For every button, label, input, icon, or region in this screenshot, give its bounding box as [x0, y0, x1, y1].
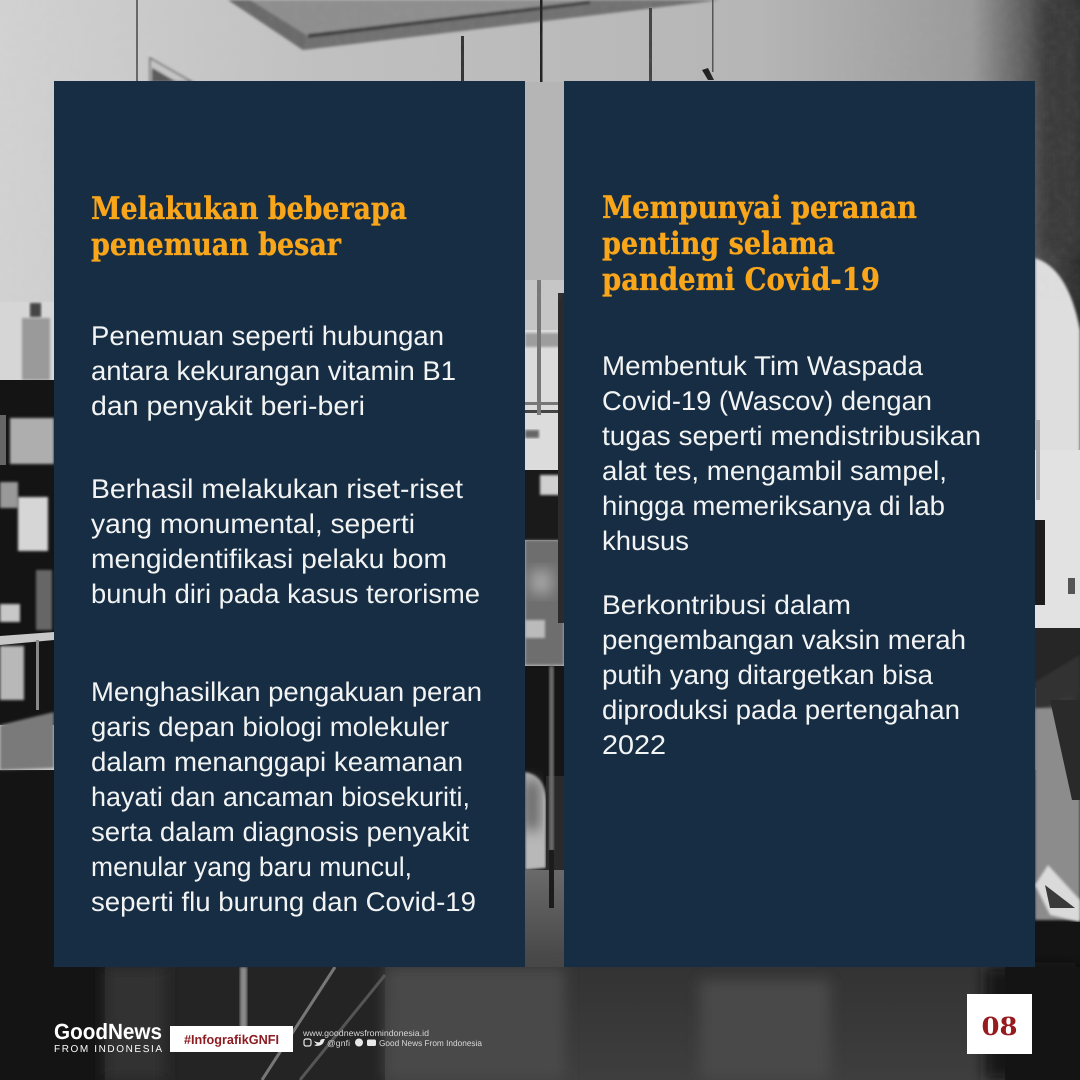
- logo: GoodNews From Indonesia: [54, 1019, 162, 1055]
- hashtag label: #InfografikGNFI: [184, 1032, 279, 1047]
- heading: Mempunyai peranan penting selama pandemi Covid-19: [602, 190, 917, 298]
- text block: biologi molekuler: dalam menanggapi keamanan: [91, 747, 463, 777]
- text block: vaksin merah putih: [602, 590, 966, 760]
- left shelves: [0, 302, 54, 382]
- centre gap between panels: [525, 82, 564, 282]
- icon: instagram: [304, 1039, 311, 1046]
- social links: [302, 1028, 482, 1048]
- icon: youtube: [367, 1040, 376, 1046]
- icon: twitter: [314, 1039, 325, 1046]
- text block: vitamin B1: Penemuan seperti hubungan: [91, 321, 444, 351]
- text block: biologi molekuler: [91, 677, 482, 917]
- text block: riset monumental: mengidentifikasi pelaku bom: [91, 544, 447, 574]
- panel: right navy card: [564, 81, 1035, 967]
- text block: biologi molekuler: garis depan biologi molekuler: [91, 712, 449, 742]
- text block: vaksin merah putih: Berkontribusi dalam: [602, 590, 851, 620]
- logo: GoodNews From Indonesia: FROM INDONESIA: [54, 1044, 162, 1055]
- text block: vaksin merah putih: pengembangan vaksin merah: [602, 625, 966, 655]
- heading: Melakukan beberapa penemuan besar: penemuan besar: [91, 227, 342, 263]
- text block: riset monumental: bunuh diri pada kasus terorisme: [91, 579, 480, 609]
- text block: riset monumental: yang monumental, seperti: [91, 509, 415, 539]
- text block: riset monumental: Berhasil melakukan riset-riset: [91, 474, 464, 504]
- text block: Tim Wascov: khusus: [602, 526, 689, 556]
- heading: Mempunyai peranan penting selama pandemi Covid-19: pandemi Covid-19: [602, 262, 880, 298]
- ceiling: [228, 0, 720, 50]
- heading: Melakukan beberapa penemuan besar: [91, 191, 407, 263]
- text block: vitamin B1: antara kekurangan vitamin B1: [91, 356, 456, 386]
- text block: biologi molekuler: serta dalam diagnosis penyakit: [91, 817, 469, 847]
- page number badge: 08: [982, 1012, 1018, 1041]
- social links: Good News From Indonesia: [379, 1038, 482, 1048]
- icon: facebook: [355, 1038, 363, 1046]
- heading: Mempunyai peranan penting selama pandemi Covid-19: Mempunyai peranan: [602, 190, 917, 226]
- text block: biologi molekuler: menular yang baru muncul,: [91, 852, 412, 882]
- heading: Melakukan beberapa penemuan besar: Melakukan beberapa: [91, 191, 407, 227]
- heading: Mempunyai peranan penting selama pandemi Covid-19: penting selama: [602, 226, 835, 262]
- right side equipment: [1035, 450, 1080, 630]
- social links: @gnfi: [327, 1038, 350, 1048]
- text block: Tim Wascov: tugas seperti mendistribusikan: [602, 421, 981, 451]
- text block: Tim Wascov: Membentuk Tim Waspada: [602, 351, 924, 381]
- panel: left navy card: [54, 81, 525, 967]
- text block: vitamin B1: [91, 321, 456, 421]
- text block: vaksin merah putih: diproduksi pada pertengahan: [602, 695, 960, 725]
- text block: biologi molekuler: seperti flu burung dan Covid-19: [91, 887, 476, 917]
- text block: vaksin merah putih: 2022: [602, 730, 666, 760]
- hashtag label: [170, 1026, 293, 1052]
- page number badge: [967, 994, 1032, 1054]
- text block: biologi molekuler: Menghasilkan pengakuan peran: [91, 677, 482, 707]
- social links: www.goodnewsfromindonesia.id: [302, 1028, 429, 1038]
- text block: Tim Wascov: hingga memeriksanya di lab: [602, 491, 945, 521]
- floor: [105, 967, 1005, 1080]
- logo: GoodNews From Indonesia: GoodNews: [54, 1019, 162, 1044]
- text block: Tim Wascov: alat tes, mengambil sampel,: [602, 456, 947, 486]
- text block: Tim Wascov: [602, 351, 981, 556]
- text block: vitamin B1: dan penyakit beri-beri: [91, 391, 365, 421]
- text block: riset monumental: [91, 474, 480, 609]
- text block: biologi molekuler: hayati dan ancaman biosekuriti,: [91, 782, 470, 812]
- text block: Tim Wascov: Covid-19 (Wascov) dengan: [602, 386, 932, 416]
- text block: vaksin merah putih: putih yang ditargetkan bisa: [602, 660, 934, 690]
